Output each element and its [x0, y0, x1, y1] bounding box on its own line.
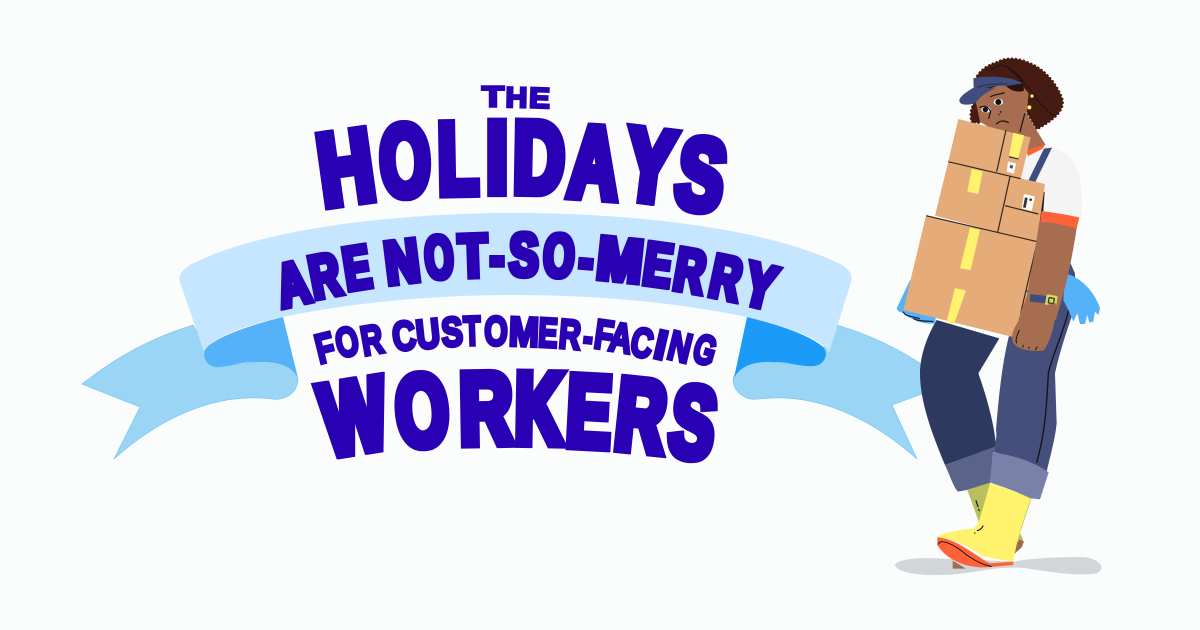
- hand: [1012, 303, 1056, 351]
- heading: WORKERS: E: [564, 354, 614, 470]
- heading: HOLIDAYS: A: [566, 105, 622, 222]
- heading: WORKERS: O: [391, 353, 453, 470]
- heading: ARE NOT-SO-MERRY: M: [594, 225, 646, 297]
- heading: FOR CUSTOMER-FACING: A: [606, 313, 636, 362]
- heading: ARE NOT-SO-MERRY: R: [304, 241, 346, 313]
- heading: ARE NOT-SO-MERRY: -: [490, 222, 504, 291]
- hair: [971, 59, 1063, 129]
- t-shirt: [1020, 144, 1082, 247]
- heading: HOLIDAYS: S: [669, 115, 733, 235]
- heading: FOR CUSTOMER-FACING: M: [508, 309, 540, 356]
- heading: ARE NOT-SO-MERRY: E: [339, 232, 375, 303]
- heading: HOLIDAYS: D: [513, 100, 565, 215]
- visor: [959, 77, 1023, 105]
- heading: FOR CUSTOMER-FACING: F: [592, 310, 616, 359]
- heading: HOLIDAYS: O: [377, 103, 433, 220]
- ribbon right tail: [733, 325, 949, 459]
- back cuff: [945, 447, 995, 492]
- heading: FOR CUSTOMER-FACING: S: [440, 308, 464, 356]
- heading: HOLIDAYS: I: [486, 102, 508, 215]
- back leg: [920, 320, 999, 465]
- heading: FOR CUSTOMER-FACING: N: [664, 322, 696, 372]
- ground shadow: [895, 557, 1101, 575]
- arm: [1018, 222, 1077, 320]
- watch: [1030, 294, 1058, 307]
- front cuff: [990, 452, 1049, 499]
- heading: FOR CUSTOMER-FACING: I: [650, 321, 672, 368]
- front boot: [937, 483, 1031, 567]
- title: [270, 81, 783, 483]
- heading: ARE NOT-SO-MERRY: T: [458, 222, 488, 291]
- heading: THE: E: [529, 82, 550, 115]
- lower body: [895, 240, 1101, 575]
- heading: HOLIDAYS: Y: [620, 105, 681, 225]
- heading: FOR CUSTOMER-FACING: -: [581, 314, 595, 361]
- front leg: [993, 240, 1075, 472]
- heading: FOR CUSTOMER-FACING: O: [331, 317, 363, 367]
- heading: ARE NOT-SO-MERRY: -: [577, 224, 596, 293]
- heading: FOR CUSTOMER-FACING: F: [310, 323, 339, 373]
- heading: THE: T: [482, 81, 504, 113]
- heading: ARE NOT-SO-MERRY: A: [270, 248, 316, 321]
- heading: FOR CUSTOMER-FACING: G: [688, 326, 722, 375]
- heading: FOR CUSTOMER-FACING: E: [537, 310, 559, 357]
- heading: WORKERS: R: [459, 351, 513, 466]
- right glove: [1063, 273, 1100, 324]
- stacked boxes: [903, 119, 1045, 338]
- top box: [948, 119, 1031, 179]
- ribbon right fold: [734, 317, 826, 378]
- illustration: worker carrying boxes: [895, 59, 1101, 575]
- bottom box: [903, 216, 1037, 338]
- heading: ARE NOT-SO-MERRY: Y: [738, 249, 783, 323]
- heading: ARE NOT-SO-MERRY: O: [542, 221, 576, 291]
- heading: FOR CUSTOMER-FACING: T: [463, 308, 482, 355]
- heading: ARE NOT-SO-MERRY: S: [509, 221, 539, 290]
- heading: THE: H: [505, 83, 528, 114]
- heading: FOR CUSTOMER-FACING: [310, 307, 722, 375]
- ribbon main band: [179, 213, 852, 353]
- ribbon left fold: [204, 317, 298, 378]
- heading: FOR CUSTOMER-FACING: C: [389, 312, 419, 360]
- shirt sleeve cuff: [1040, 211, 1079, 228]
- heading: HOLIDAYS: [311, 100, 733, 235]
- heading: WORKERS: S: [663, 364, 723, 483]
- back boot: [953, 482, 1032, 569]
- heading: FOR CUSTOMER-FACING: R: [357, 315, 387, 365]
- heading: FOR CUSTOMER-FACING: C: [627, 318, 657, 368]
- heading: HOLIDAYS: L: [437, 103, 479, 217]
- heading: ARE NOT-SO-MERRY: [270, 221, 783, 323]
- heading: FOR CUSTOMER-FACING: O: [484, 307, 508, 354]
- heading: FOR CUSTOMER-FACING: R: [557, 310, 583, 358]
- middle box: [935, 162, 1045, 243]
- ribbon left tail: [82, 325, 298, 459]
- face: [974, 65, 1055, 152]
- heading: WORKERS: K: [514, 352, 564, 467]
- heading: THE: [482, 81, 550, 115]
- left glove: [897, 280, 937, 324]
- upper body: [897, 59, 1100, 338]
- heading: HOLIDAYS: H: [311, 107, 381, 228]
- heading: ARE NOT-SO-MERRY: N: [381, 226, 423, 298]
- heading: ARE NOT-SO-MERRY: R: [704, 242, 747, 315]
- heading: ARE NOT-SO-MERRY: E: [640, 230, 676, 301]
- heading: WORKERS: R: [611, 358, 671, 475]
- heading: WORKERS: [313, 351, 723, 483]
- ribbon banner: [82, 213, 949, 459]
- heading: WORKERS: W: [313, 356, 396, 478]
- heading: ARE NOT-SO-MERRY: R: [669, 236, 710, 308]
- heading: FOR CUSTOMER-FACING: U: [414, 309, 442, 358]
- heading: ARE NOT-SO-MERRY: O: [422, 222, 456, 293]
